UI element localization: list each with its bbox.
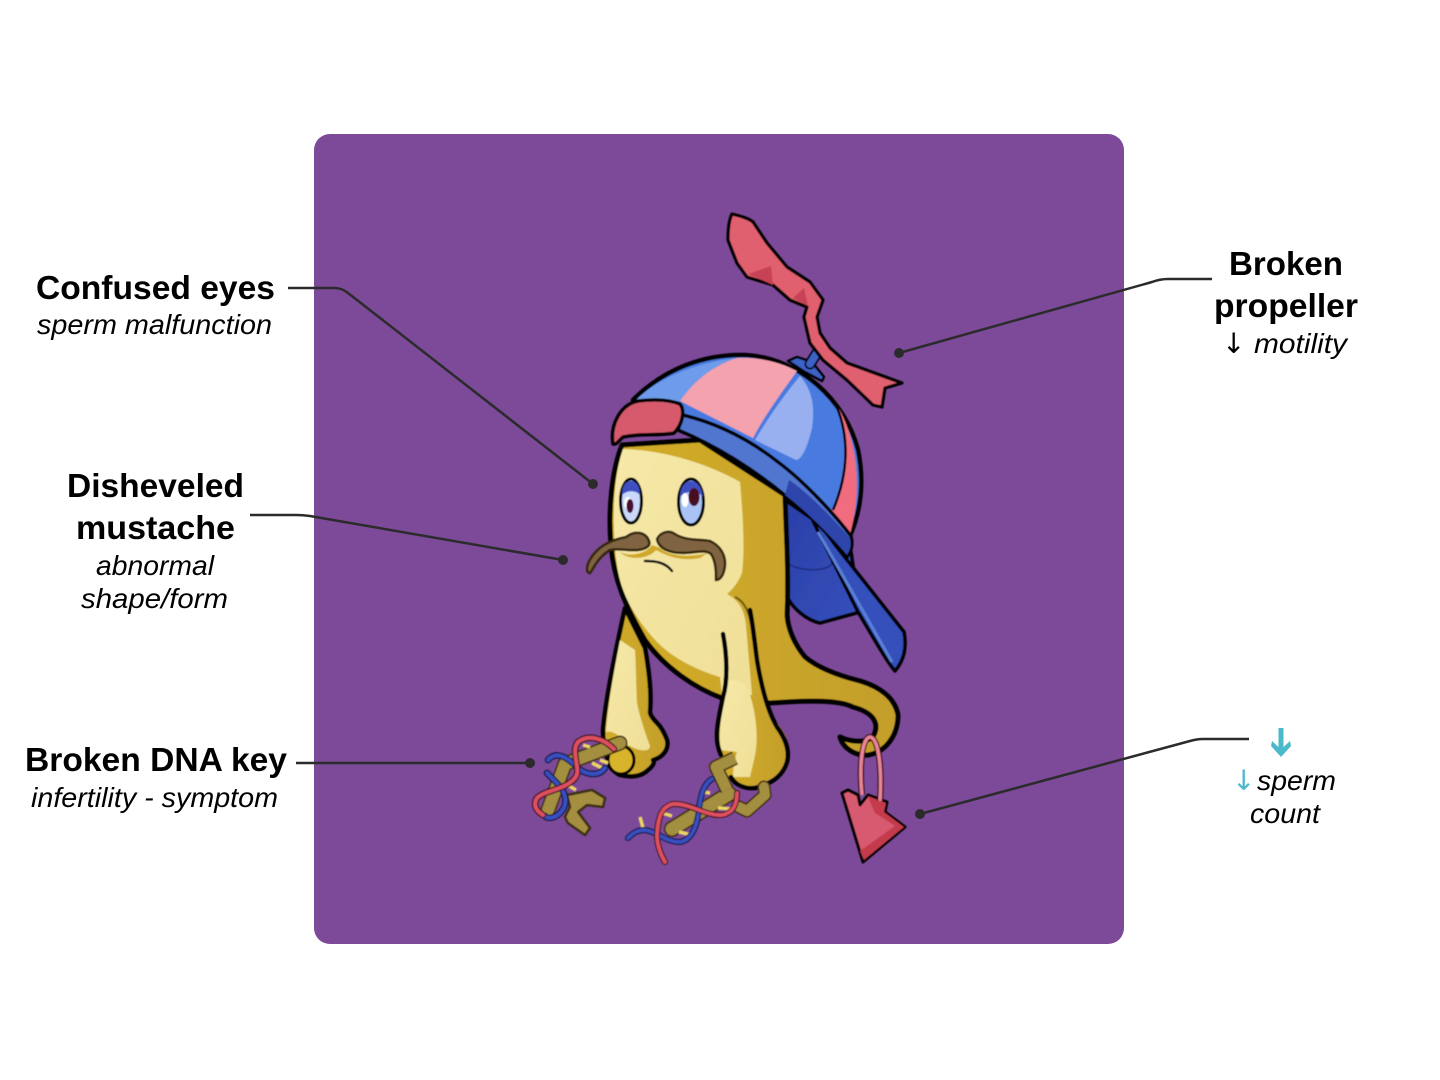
label: disheveled mustache: Disheveled [67, 467, 244, 504]
label: broken DNA key [25, 741, 288, 813]
right pink strip [832, 407, 857, 538]
tail weight [842, 790, 905, 862]
red cap peak [612, 400, 683, 444]
label: broken propeller: propeller [1214, 287, 1358, 324]
loop: broken pink cord [861, 737, 881, 801]
label: disheveled mustache: shape/form [81, 583, 228, 614]
hat visor: dark underside and strap [785, 500, 905, 671]
disheveled mustache [587, 532, 725, 580]
leader line: sperm count [915, 739, 1249, 819]
label: broken DNA key: infertility - symptom [31, 782, 278, 813]
hat brim band [678, 415, 852, 557]
label: confused eyes [36, 269, 275, 340]
label: broken propeller: motility [1254, 328, 1349, 359]
label: confused eyes: sperm malfunction [37, 309, 272, 340]
mouth [645, 561, 672, 571]
broken DNA key: right [628, 758, 765, 862]
label: broken DNA key: Broken DNA key [25, 741, 288, 778]
broken propeller [728, 214, 902, 407]
eyes: confused [620, 479, 704, 525]
left arm [603, 608, 667, 776]
face highlight [614, 449, 752, 695]
illustration: confused sperm mascot [535, 214, 905, 862]
body and tail [610, 440, 898, 755]
label: broken propeller: ↓ [1222, 327, 1245, 360]
label: disheveled mustache: mustache [76, 509, 235, 546]
hat button and stem [788, 348, 824, 381]
leader line: confused eyes [288, 288, 598, 489]
label: sperm count [1232, 764, 1336, 829]
pink panel [680, 358, 797, 438]
broken DNA key: left [535, 738, 620, 835]
left blue panel [636, 358, 738, 401]
icon: teal down arrow [1271, 728, 1291, 757]
label: broken propeller: Broken [1229, 245, 1343, 282]
leader line: propeller [894, 279, 1212, 358]
label: disheveled mustache [67, 467, 244, 614]
label: sperm count: count [1250, 798, 1321, 829]
right arm [717, 610, 788, 788]
leader line: DNA key [296, 758, 535, 768]
panel: purple background [314, 134, 1124, 944]
body crease [735, 597, 753, 640]
right blue panel highlight [755, 376, 813, 460]
label: confused eyes: Confused eyes [36, 269, 275, 306]
label: broken propeller [1214, 245, 1358, 360]
hat dome: propeller beanie [633, 355, 861, 540]
label: sperm count: ↓ [1232, 764, 1255, 797]
label: disheveled mustache: abnormal [96, 550, 215, 581]
leader line: mustache [250, 515, 568, 565]
label: sperm count: sperm [1257, 765, 1336, 796]
